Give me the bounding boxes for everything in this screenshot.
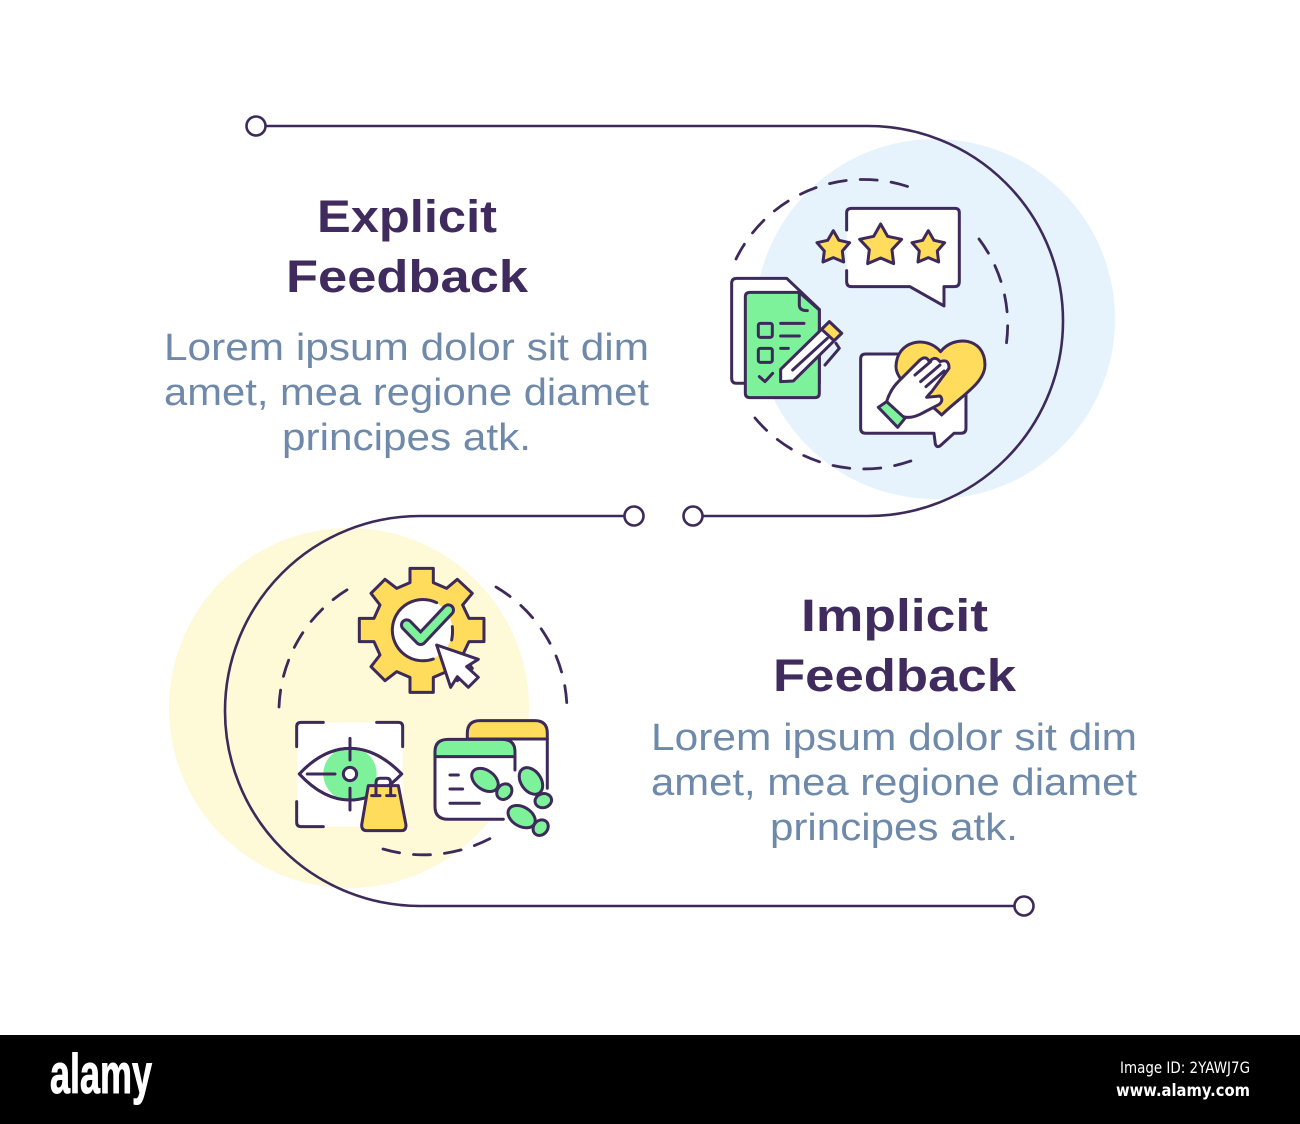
connector line: bottom section [225,506,1034,916]
heading: implicit feedback: Implicit [801,590,988,641]
icon: gear with check mark and cursor [359,568,484,692]
text block: explicit feedback description: amet, mea regione diamet [164,372,649,414]
icon: star rating speech bubble [817,208,959,306]
footer website: www.alamy.com [1116,1081,1250,1101]
connector line: top section [246,116,1063,526]
background circle: blue [755,139,1115,499]
icon: eye tracking with shopping bag [297,722,406,831]
heading: explicit feedback [286,191,529,302]
footer band [0,1035,1300,1124]
heading: implicit feedback [773,590,1017,701]
icon: checklist document with pencil [732,278,842,398]
text block: explicit feedback description: Lorem ipsum dolor sit dim [164,327,649,369]
text block: explicit feedback description [164,327,649,459]
dashed ring: explicit [736,179,1008,469]
footer image id: Image ID: 2YAWJ7G [1120,1058,1250,1077]
text block: implicit feedback description: principes atk. [770,807,1018,849]
footer logo: alamy [50,1042,152,1105]
text block: explicit feedback description: principes atk. [282,417,531,459]
text block: implicit feedback description [651,717,1137,849]
dashed ring: implicit [279,587,567,855]
text block: implicit feedback description: Lorem ipsum dolor sit dim [651,717,1137,759]
text block: implicit feedback description: amet, mea regione diamet [651,762,1137,804]
heading: explicit feedback: Explicit [317,191,497,242]
icon: hand on heart speech bubble [861,341,985,447]
heading: implicit feedback: Feedback [773,650,1017,701]
background circle: yellow [169,528,529,888]
heading: explicit feedback: Feedback [286,251,529,302]
icon: browser windows with footprints [435,721,553,839]
